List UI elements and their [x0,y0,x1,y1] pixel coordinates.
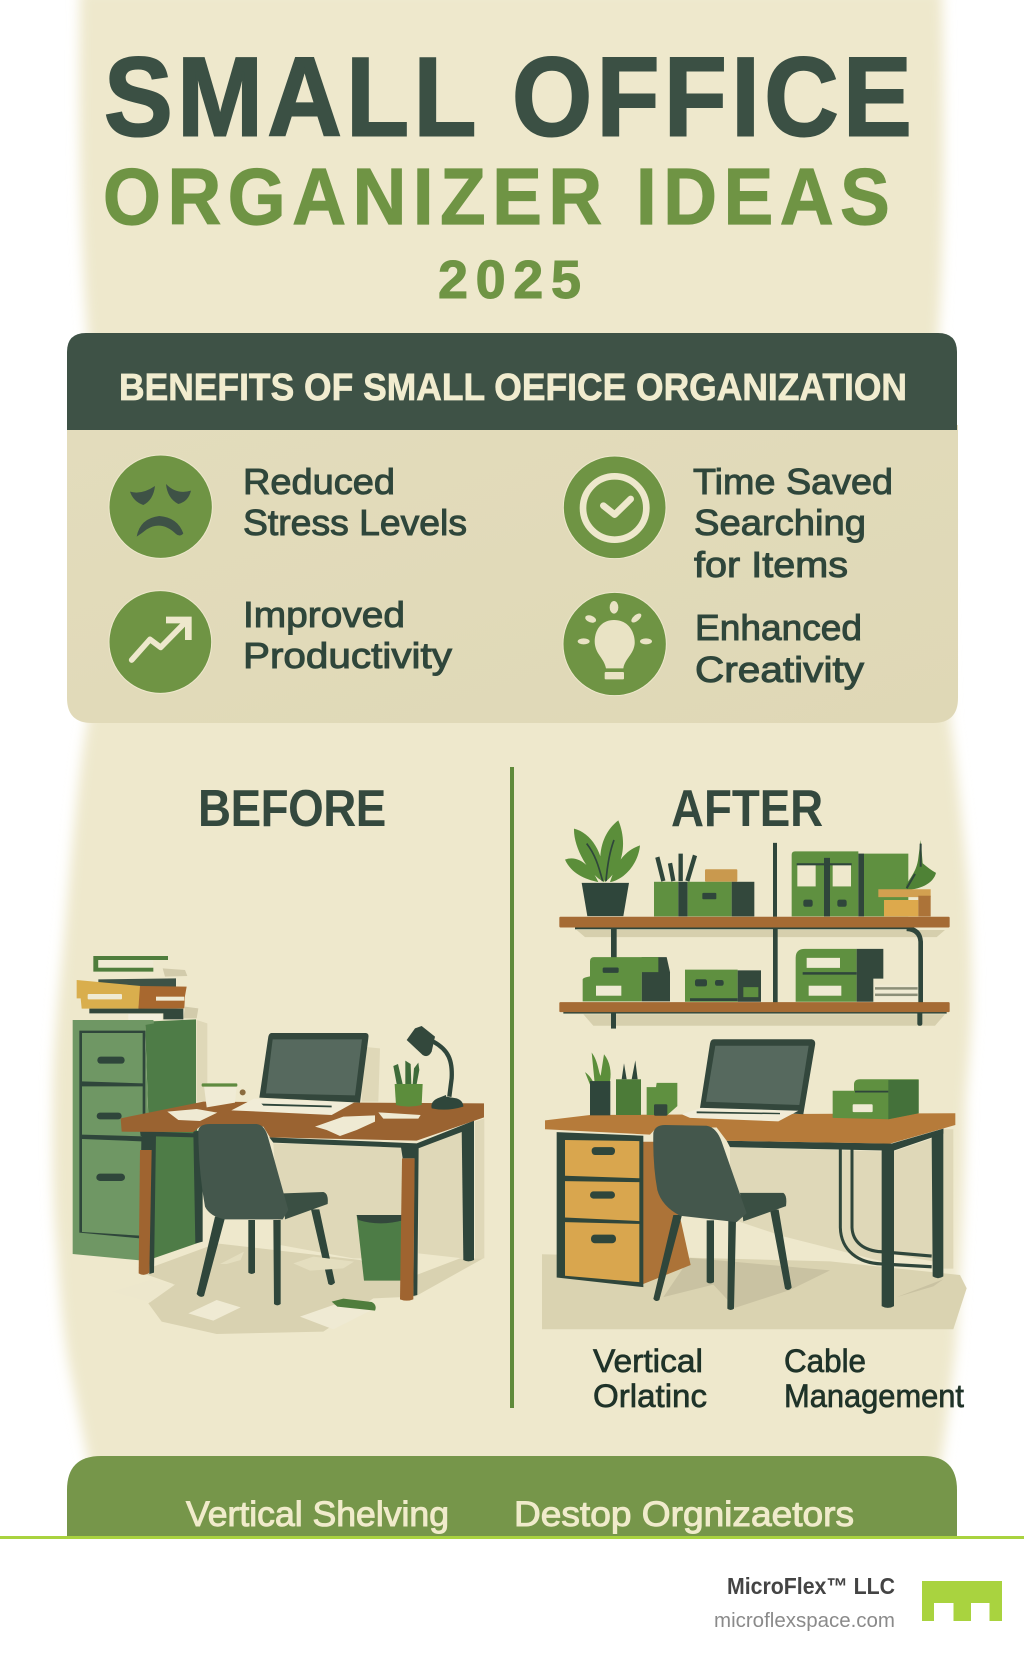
callout labels: vertical / cable: Orlatinc [593,1378,707,1414]
callout labels: vertical / cable [593,1343,964,1414]
benefit text: reduced stress: Reduced [243,461,395,502]
benefit text: productivity: Productivity [243,635,452,676]
title year: 2025 [438,250,581,310]
footer background [0,1538,1024,1666]
chair [197,1124,335,1305]
desk lamp [407,1026,463,1110]
banner shape [67,1456,957,1538]
panel: benefits [67,333,958,723]
icon: growth arrow [109,591,212,693]
desktop organizer box [833,1079,919,1119]
icon: stressed face [109,455,212,558]
title line 1: SMALL OFFICE [104,35,912,159]
storage box lower left [583,957,670,1001]
heading: before: BEFORE [198,780,386,838]
benefit text: creativity [695,607,864,690]
divider between before and after [510,767,514,1408]
desk top [545,1113,955,1144]
heading: after: AFTER [671,780,823,838]
website: microflexspace.com [714,1610,895,1632]
icon: light bulb [563,592,666,696]
pen holder [393,1061,423,1107]
desk legs [882,1129,943,1308]
cable management [840,1149,932,1267]
banner text left: Vertical Shelving [186,1495,449,1534]
benefit text: time saved: Searching [694,502,866,543]
paper stack on cabinet [77,956,198,1020]
illustration: organized desk (after) [542,820,967,1329]
floor shadow [143,1243,483,1334]
waste bin [357,1215,404,1281]
callout labels: vertical / cable: Cable [784,1343,866,1379]
panel heading: BENEFITS OF SMALL OEFICE ORGANIZATION [119,367,907,409]
coffee cup [202,1083,246,1107]
benefit text: time saved: Time Saved [693,461,893,502]
company name: MicroFlex™ LLC [727,1573,895,1599]
title line 2: ORGANIZER IDEAS [103,153,890,242]
drawer unit side [642,1142,691,1285]
small plant box on shelf [878,840,936,916]
binders [792,851,908,916]
desk [121,1102,484,1301]
potted plant [565,820,640,916]
callout labels: vertical / cable: Management [784,1378,964,1414]
logo [922,1581,1002,1621]
panel header bar [67,333,957,430]
floor papers and clutter [112,1252,376,1329]
icon: target check [563,456,666,559]
benefit text: creativity: Creativity [695,649,864,690]
benefit text: productivity [243,594,452,676]
wall shadow under desk [730,1129,953,1269]
illustration: cluttered desk (before) [73,956,484,1334]
filing cabinet [73,1019,202,1262]
desk plants and pens [585,1052,677,1116]
chair [653,1125,792,1310]
benefit text: reduced stress [243,461,467,543]
desk papers [167,1109,421,1136]
benefit text: time saved: for Items [694,544,848,585]
storage box lower right with books [796,949,918,1002]
benefit text: reduced stress: Stress Levels [243,502,467,543]
benefit text: time saved [693,461,893,585]
wall shadow under desk [197,1020,484,1258]
drawer unit [557,1132,643,1287]
floor shadow [663,1258,943,1308]
title [103,35,912,310]
panel body [67,425,958,723]
floor [542,1254,967,1329]
desk [545,1113,955,1308]
benefit text: creativity: Enhanced [695,607,862,648]
laptop [231,1033,369,1115]
footer [0,1536,1024,1666]
laptop [682,1039,815,1121]
cream paper background [53,0,972,1470]
pens and storage box [654,854,754,916]
wall shelves [559,843,950,1029]
footer accent line [0,1536,1024,1539]
storage box lower middle [685,970,761,1002]
bottom green banner [67,1456,957,1538]
benefit text: productivity: Improved [243,594,405,635]
banner text right: Destop Orgnizaetors [514,1495,854,1534]
callout labels: vertical / cable: Vertical [593,1343,703,1379]
